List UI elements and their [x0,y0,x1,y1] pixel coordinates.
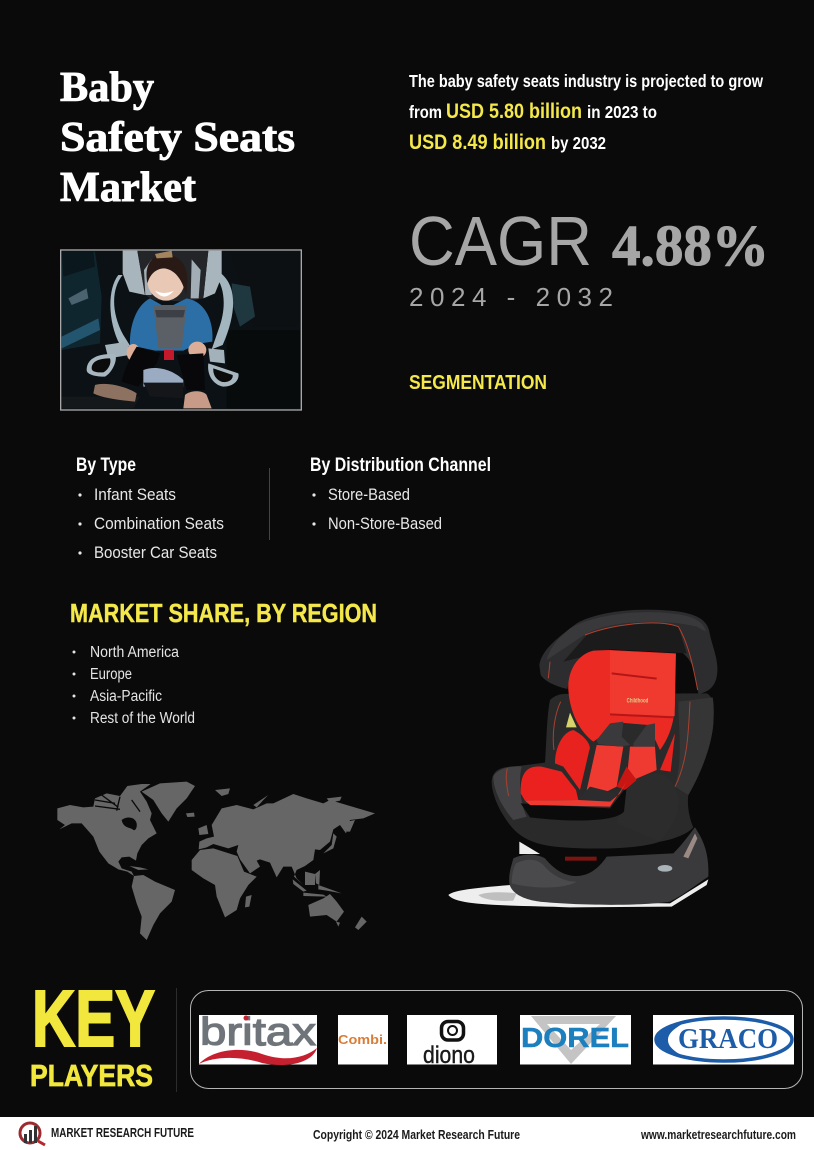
market share heading: MARKET SHARE, BY REGION [70,600,377,628]
company name: MARKET RESEARCH FUTURE [51,1125,194,1140]
region list: North America [90,644,179,661]
region list [72,644,195,727]
by type list [76,455,224,562]
market projection text: in 2023 to [587,102,657,122]
title: Baby [60,65,154,111]
logo: diono: diono [423,1042,475,1069]
illustration: car seat [448,610,717,907]
baby legs [122,347,205,390]
base [509,827,708,905]
shoes [93,384,137,402]
icon: company logo [20,1123,45,1145]
market projection text [409,71,763,154]
baby head [147,261,185,301]
market projection text: from [409,102,442,122]
logo: Combi: Combi. [338,1032,387,1047]
title: Market [60,165,196,211]
by distribution channel list: Store-Based [328,485,410,504]
logo: britax [199,1011,317,1065]
by type list: By Type [76,455,136,476]
seat side wings [110,273,233,349]
key players heading: PLAYERS [30,1058,153,1093]
key players heading: KEY [32,974,155,1063]
logo: Graco [653,1015,794,1064]
logo: Dorel [520,1015,631,1064]
logo: britax: britax [200,1011,317,1054]
copyright: Copyright © 2024 Market Research Future [313,1127,520,1142]
region list: Asia-Pacific [90,688,162,705]
tag [566,713,577,727]
footer bar [0,1117,814,1150]
logo: Graco: GRACO [678,1023,778,1055]
floor shadow [448,879,708,907]
CAGR figure [409,202,769,312]
canopy [539,610,717,694]
world map [57,782,375,940]
by type list: Infant Seats [94,485,176,504]
by type list: Combination Seats [94,514,224,533]
by distribution channel list: By Distribution Channel [310,455,491,476]
title: Safety Seats [60,115,295,161]
by type list: Booster Car Seats [94,543,217,562]
armrests [87,354,239,387]
logo: Combi [338,1015,388,1064]
key players heading [30,974,155,1093]
title [60,65,295,211]
seat pad [521,766,578,801]
logo: Dorel: DOREL [521,1022,629,1053]
CAGR figure: 2024 - 2032 [409,282,613,312]
market projection text: USD 5.80 billion [446,100,582,123]
segmentation heading: SEGMENTATION [409,371,547,394]
CAGR figure: 4.88% [612,213,769,278]
by distribution channel list: Non-Store-Based [328,514,442,533]
illustration: car seat: Childhood [627,698,649,704]
baby torso [130,298,213,351]
photo: baby in car seat [61,250,301,410]
key players panel [190,990,802,1088]
region list: Europe [90,666,132,683]
market projection text: USD 8.49 billion [409,131,546,154]
harness straps [597,722,630,747]
red headrest [568,650,676,750]
by distribution channel list [310,455,491,533]
logo: diono [407,1015,497,1069]
seat shell [492,693,714,849]
CAGR figure: CAGR [409,202,592,280]
red lower cushions [555,730,590,790]
baby hands [127,344,140,361]
region list: Rest of the World [90,710,195,727]
market projection text: by 2032 [551,133,606,153]
